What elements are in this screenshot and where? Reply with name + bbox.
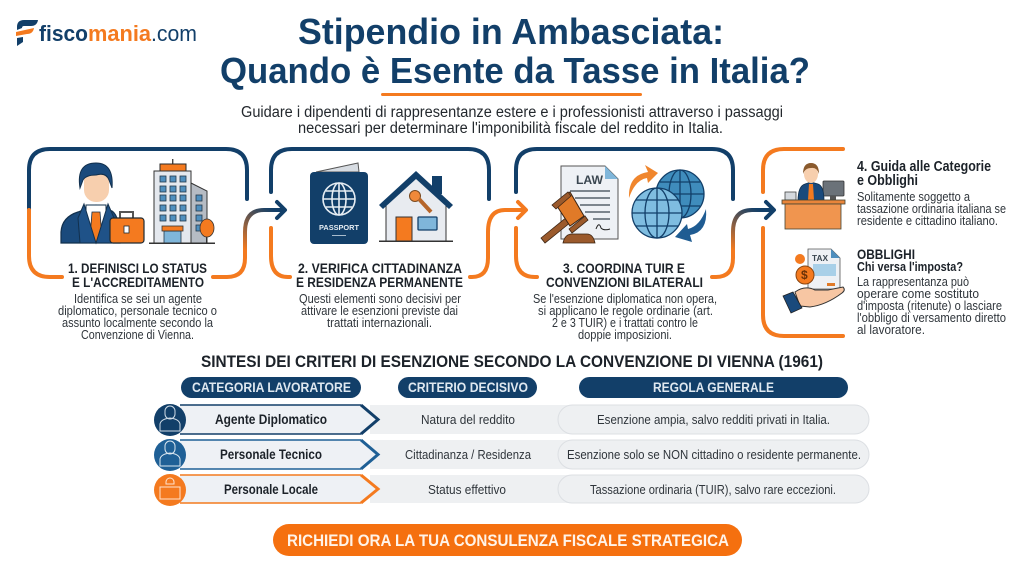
heading: table title: SINTESI DEI CRITERI DI ESENZIONE SECONDO LA CONVENZIONE DI VIENNA (1961) xyxy=(201,353,823,371)
logo: fiscomania.com: fisco xyxy=(39,21,88,46)
text: step 3 description xyxy=(533,292,717,342)
icon: local staff badge xyxy=(154,474,186,506)
text: obblighi description: d'imposta (ritenute) o lasciare xyxy=(857,299,1002,313)
subtitle xyxy=(241,104,783,137)
panel: step 3 xyxy=(516,149,733,342)
icon: diplomat badge xyxy=(154,404,186,436)
icon: person at desk xyxy=(782,163,845,229)
row: agente diplomatico: Natura del reddito xyxy=(421,412,515,427)
row: personale tecnico: Cittadinanza / Residenza xyxy=(405,447,532,462)
title: Stipendio in Ambasciata: xyxy=(298,11,724,52)
heading: step 2: E RESIDENZA PERMANENTE xyxy=(296,274,463,290)
text: step 4 description: tassazione ordinaria italiana se xyxy=(857,202,1006,216)
heading: step 3: 3. COORDINA TUIR E xyxy=(563,260,685,276)
panel: step 2 xyxy=(271,149,526,330)
icon: diplomat with briefcase xyxy=(61,163,144,243)
text: obblighi description: La rappresentanza può xyxy=(857,275,969,289)
icon: embassy building xyxy=(149,159,215,244)
row: agente diplomatico: Agente Diplomatico xyxy=(215,412,327,427)
row: personale tecnico: Esenzione solo se NON cittadino o residente permanente. xyxy=(567,447,861,462)
text: step 2 description: trattati internazionali. xyxy=(327,316,432,330)
panel frame 1 xyxy=(29,149,247,277)
table header: REGOLA GENERALE xyxy=(653,380,774,395)
panel: step 4 xyxy=(763,149,1006,337)
text: step 2 description: attivare le esenzioni previste dai xyxy=(301,304,458,318)
logo: fiscomania.com xyxy=(16,20,197,46)
title underline xyxy=(381,93,642,96)
heading: step 2: 2. VERIFICA CITTADINANZA xyxy=(298,260,462,276)
heading: step 3: CONVENZIONI BILATERALI xyxy=(546,274,703,290)
title: Quando è Esente da Tasse in Italia? xyxy=(220,50,810,91)
heading: obblighi xyxy=(857,246,963,274)
text: step 1 description: Convenzione di Vienna. xyxy=(81,328,194,342)
icon: tax document on hand xyxy=(783,249,844,313)
text: step 1 description: diplomatico, personale tecnico o xyxy=(58,304,217,318)
text: obblighi description xyxy=(857,275,1006,337)
text: step 3 description: si applicano le regole ordinarie (art. xyxy=(538,304,713,318)
heading: step 4: e Obblighi xyxy=(857,173,918,189)
icon: passport: PASSPORT xyxy=(319,225,360,232)
title xyxy=(220,11,810,91)
arrow: step 1 to 2 xyxy=(245,202,285,250)
heading: obblighi: Chi versa l'imposta? xyxy=(857,259,963,274)
row: personale locale xyxy=(154,474,869,506)
heading: step 3 xyxy=(546,260,703,290)
icon: house with key xyxy=(379,171,453,242)
table xyxy=(154,377,869,506)
table header: CRITERIO DECISIVO xyxy=(408,380,528,395)
text: step 3 description: Se l'esenzione diplomatica non opera, xyxy=(533,292,717,306)
panel frame 4 xyxy=(763,149,843,336)
icon: law document and gavel: LAW xyxy=(576,173,604,187)
heading: step 1: E L'ACCREDITAMENTO xyxy=(72,274,204,290)
icon: tax document on hand: TAX xyxy=(812,254,829,263)
subtitle: Guidare i dipendenti di rappresentanze estere e i professionisti attraverso i passaggi xyxy=(241,104,783,121)
row: personale tecnico: Personale Tecnico xyxy=(220,447,322,462)
panel frame 2 xyxy=(271,149,526,277)
row: agente diplomatico xyxy=(154,404,869,436)
logo: fiscomania.com: .com xyxy=(151,21,197,46)
text: step 4 description xyxy=(857,190,1006,228)
text: step 1 description: assunto localmente secondo la xyxy=(62,316,213,330)
heading: step 1: 1. DEFINISCI LO STATUS xyxy=(68,260,207,276)
text: obblighi description: l'obbligo di versamento diretto xyxy=(857,311,1006,325)
text: obblighi description: operare come sostituto xyxy=(857,287,979,301)
heading: step 2 xyxy=(296,260,463,290)
logo: fiscomania.com: mania xyxy=(88,21,152,46)
call to action button xyxy=(273,524,742,556)
row: personale locale: Tassazione ordinaria (TUIR), salvo rare eccezioni. xyxy=(590,482,836,497)
text: step 4 description: residente e cittadino italiano. xyxy=(857,214,998,228)
row: personale tecnico xyxy=(154,439,869,471)
icon: technician badge xyxy=(154,439,186,471)
subtitle: necessari per determinare l'imponibilità fiscale del reddito in Italia. xyxy=(298,120,723,137)
text: step 1 description: Identifica se sei un agente xyxy=(74,292,202,306)
icon: tax document on hand: $ xyxy=(801,268,808,282)
text: step 4 description: Solitamente soggetto a xyxy=(857,190,970,204)
text: step 3 description: 2 e 3 TUIR) e i trattati contro le xyxy=(552,316,698,330)
table header xyxy=(181,377,848,398)
heading: step 4 xyxy=(857,159,991,189)
row: personale locale: Personale Locale xyxy=(224,482,318,497)
icon: passport xyxy=(310,163,368,244)
text: step 2 description xyxy=(299,292,461,330)
heading: step 4: 4. Guida alle Categorie xyxy=(857,159,991,175)
arrow: step 3 to 4 xyxy=(733,202,774,250)
icon: law document and gavel xyxy=(541,166,618,243)
text: obblighi description: al lavoratore. xyxy=(857,323,925,337)
text: step 1 description xyxy=(58,292,217,342)
heading: step 1 xyxy=(68,260,207,290)
row: personale locale: Status effettivo xyxy=(428,482,506,497)
icon: globes with arrows xyxy=(629,165,706,242)
text: step 3 description: doppie imposizioni. xyxy=(578,328,672,342)
row: agente diplomatico: Esenzione ampia, salvo redditi privati in Italia. xyxy=(597,412,830,427)
text: step 2 description: Questi elementi sono decisivi per xyxy=(299,292,461,306)
call to action button: RICHIEDI ORA LA TUA CONSULENZA FISCALE STRATEGICA xyxy=(287,532,729,550)
table header: CATEGORIA LAVORATORE xyxy=(192,380,351,395)
heading: obblighi: OBBLIGHI xyxy=(857,246,915,262)
panel frame 3 xyxy=(516,149,733,277)
panel: step 1 xyxy=(29,149,247,342)
